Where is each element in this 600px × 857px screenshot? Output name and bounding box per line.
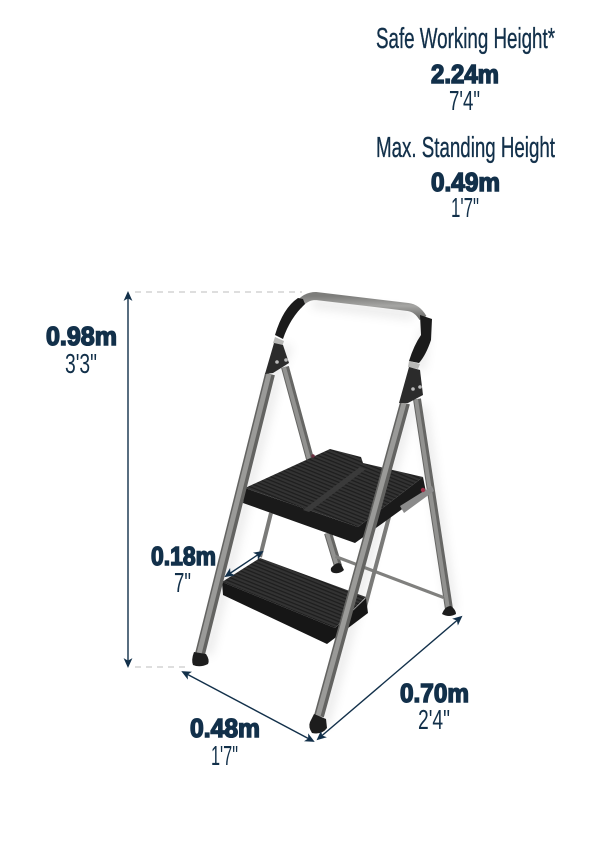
arrow: width bbox=[183, 672, 313, 741]
handle tube bbox=[298, 296, 423, 318]
stat: max standing height bbox=[376, 132, 555, 223]
left hinge bbox=[265, 343, 289, 374]
arrow: step spacing bbox=[226, 552, 262, 576]
stat: safe working height: 7'4" bbox=[449, 85, 480, 116]
right hinge bbox=[399, 367, 423, 403]
top step bbox=[243, 449, 434, 543]
brace: thin right strut bbox=[365, 517, 389, 607]
front feet bbox=[192, 652, 327, 733]
label: step spacing: 0.18m bbox=[151, 541, 216, 571]
label: depth: 0.70m bbox=[400, 678, 469, 708]
illustration: step stool bbox=[192, 296, 456, 733]
label: step spacing: 7" bbox=[174, 567, 191, 598]
rear feet bbox=[331, 563, 456, 616]
soft shadow bbox=[207, 303, 452, 725]
arrow: depth bbox=[318, 617, 461, 739]
right grip bbox=[409, 315, 432, 363]
stat: safe working height: 2.24m bbox=[431, 59, 499, 89]
arrow: height bbox=[127, 293, 129, 666]
dashed guide: top bbox=[135, 291, 302, 293]
label: height: 3'3" bbox=[65, 348, 97, 379]
dashed guide: bottom bbox=[135, 666, 190, 668]
stat: max standing height: 0.49m bbox=[431, 167, 500, 197]
label: height: 0.98m bbox=[46, 321, 117, 351]
brace: thin left strut bbox=[260, 513, 271, 557]
stat: safe working height bbox=[376, 23, 555, 116]
left grip bbox=[275, 298, 305, 339]
label: height bbox=[46, 321, 117, 379]
label: width bbox=[190, 713, 260, 771]
rear legs bbox=[284, 367, 449, 609]
bottom step bbox=[222, 558, 368, 644]
collars bbox=[273, 337, 420, 369]
stat: max standing height: 1'7" bbox=[451, 192, 479, 223]
label: width: 1'7" bbox=[211, 740, 238, 771]
label: depth: 2'4" bbox=[418, 704, 450, 735]
front legs bbox=[199, 374, 405, 716]
cross brace bbox=[335, 555, 444, 599]
label: width: 0.48m bbox=[190, 713, 260, 743]
label: step spacing bbox=[151, 541, 216, 598]
label: depth bbox=[400, 678, 469, 735]
